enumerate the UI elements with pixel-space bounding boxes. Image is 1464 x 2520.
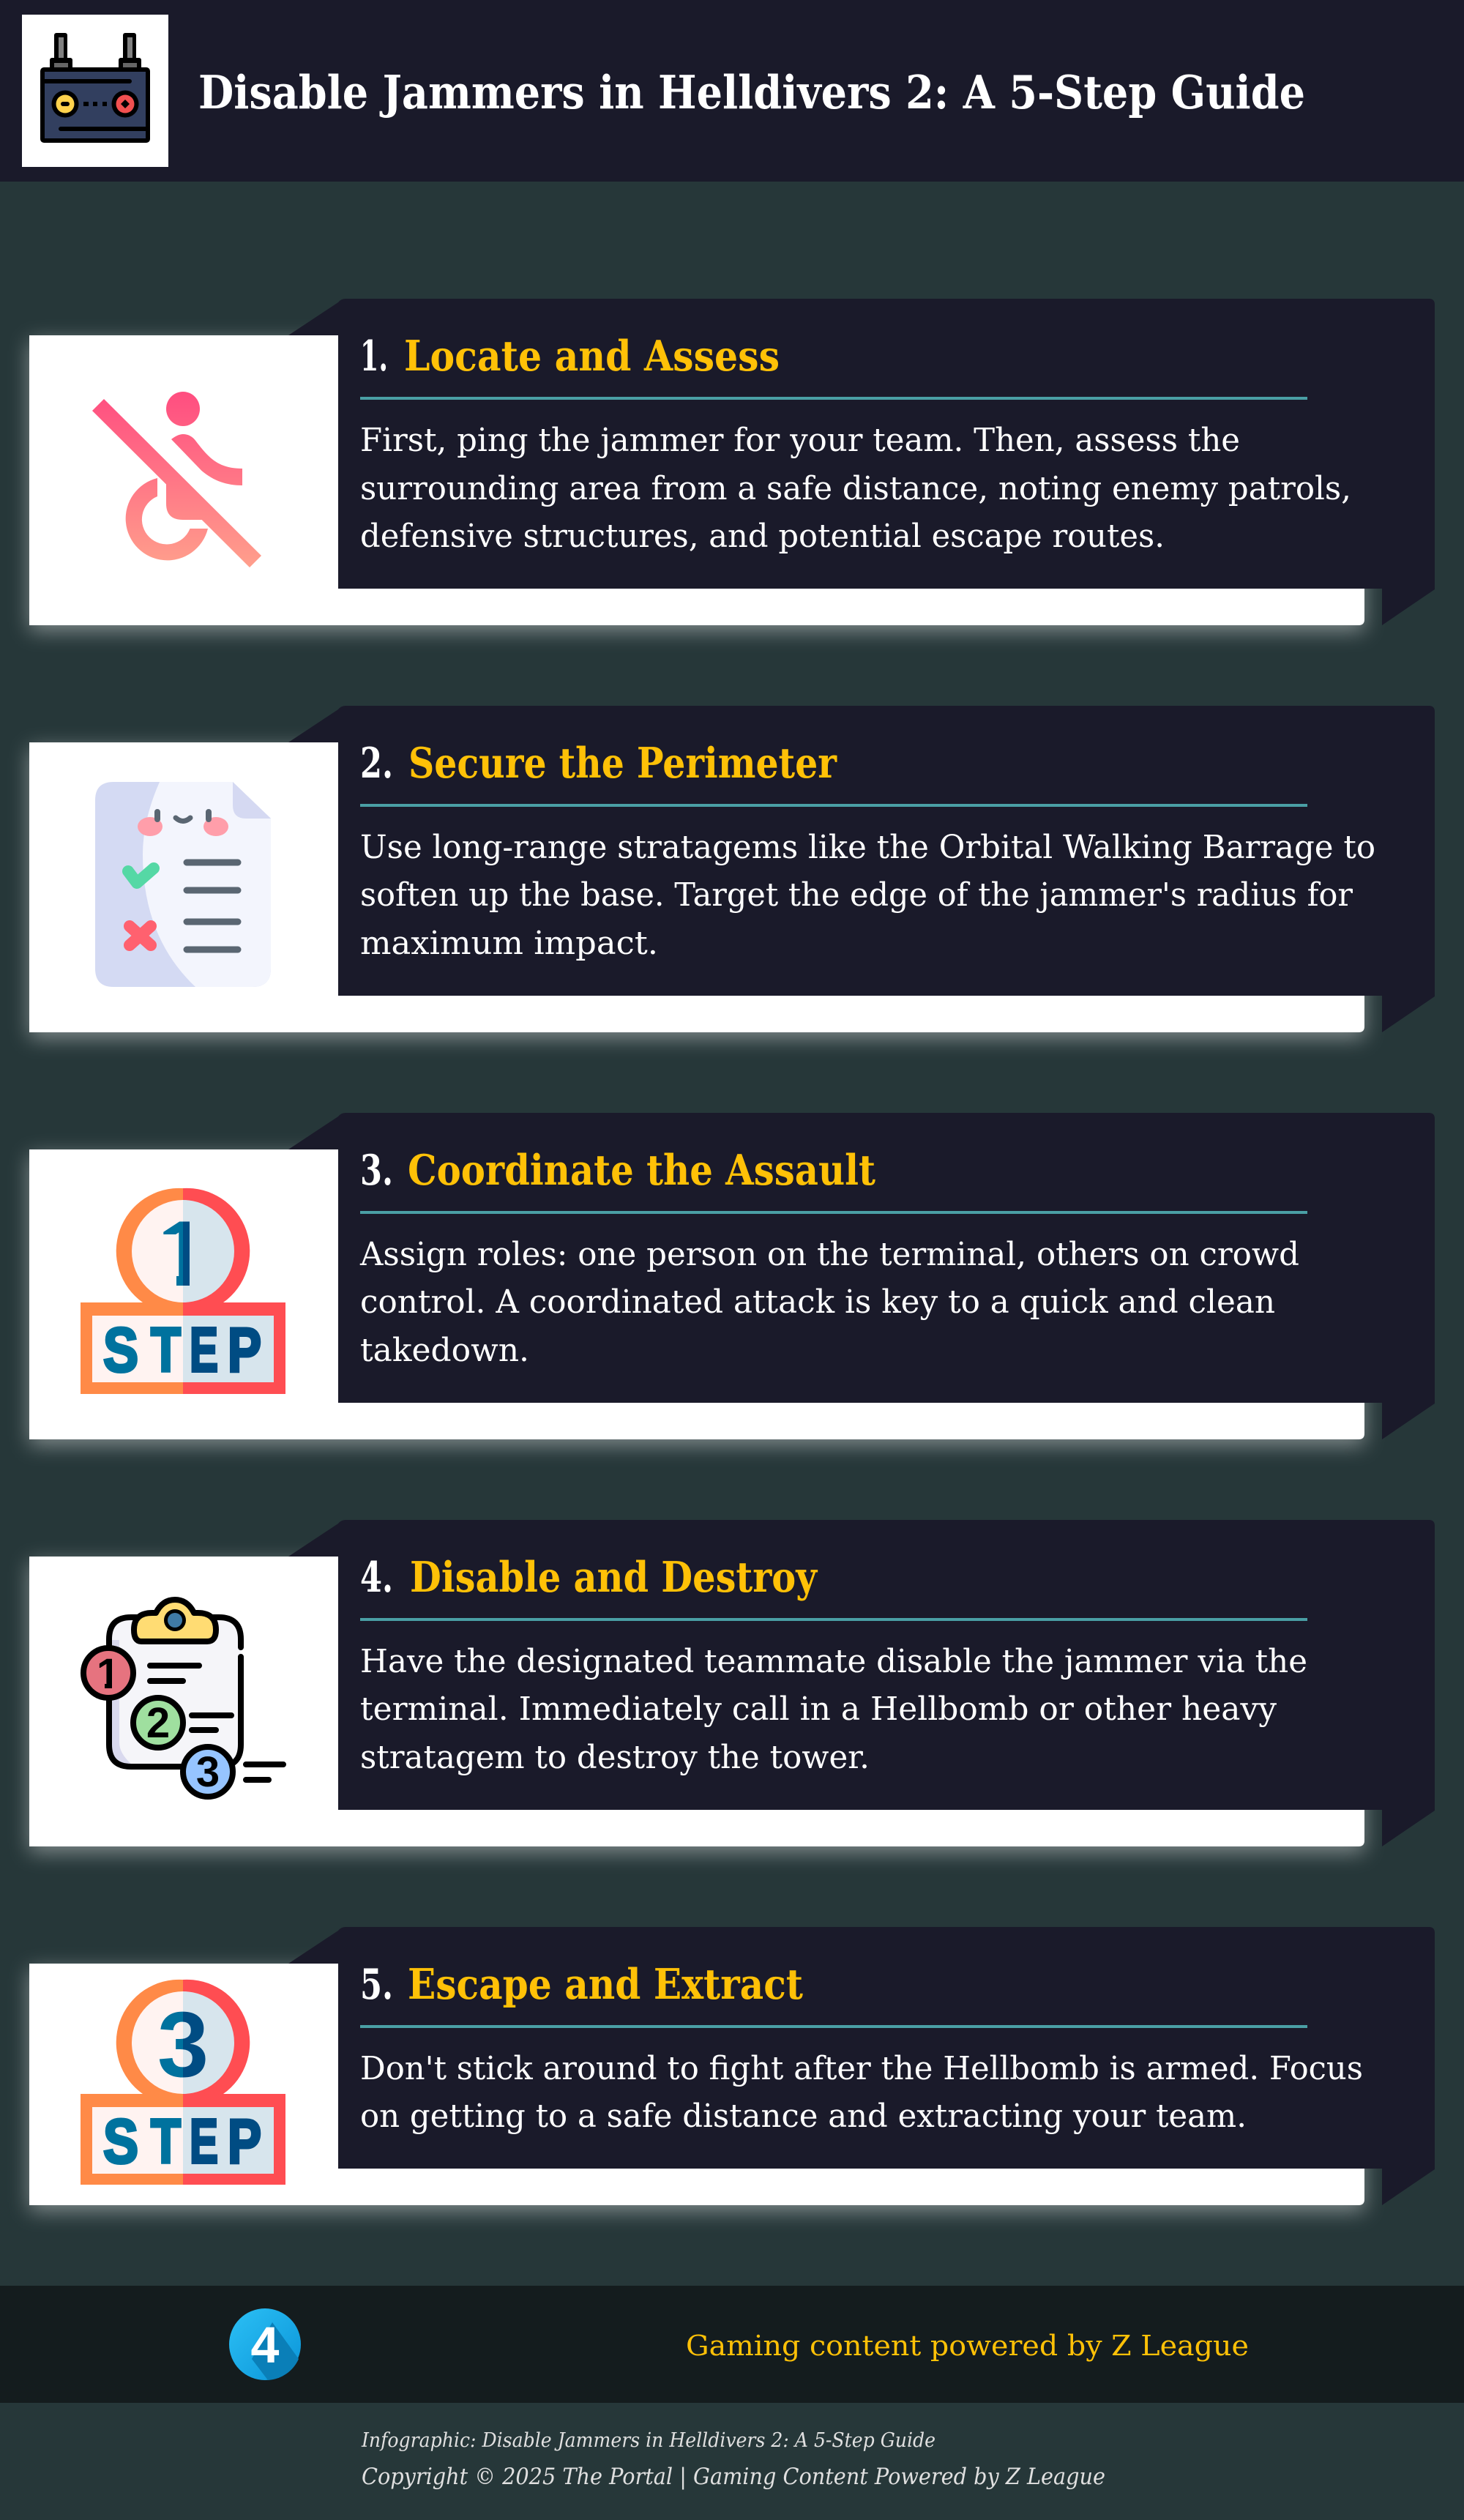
text: step 4 body (360, 1643, 1307, 1776)
text: step 3 body: takedown. (360, 1332, 529, 1369)
icon: crossed-out wheelchair (92, 392, 261, 567)
icon: step 3 badge: P (228, 2107, 261, 2177)
panel: step 4 (29, 1520, 1435, 1852)
text: step 2 body: soften up the base. Target the edge of the jammer's radius for (360, 876, 1353, 914)
icon: step 1 badge: S (103, 1316, 138, 1385)
heading: step 1: Locate and Assess (404, 332, 780, 381)
heading: step 1: 1. (360, 332, 388, 381)
text: step 3 body: Assign roles: one person on the terminal, others on crowd (359, 1236, 1299, 1273)
icon: numbered clipboard: 2 (146, 1699, 170, 1747)
text: step 4 body: terminal. Immediately call in a Hellbomb or other heavy (360, 1690, 1277, 1728)
icon: Z League logo (229, 2308, 301, 2380)
text: step 1 body: First, ping the jammer for your team. Then, assess the (360, 422, 1240, 459)
header (0, 0, 1464, 182)
icon: step 3 badge: 3 (157, 1993, 209, 2096)
footer band (0, 2286, 1464, 2403)
heading: step 3: 3. (360, 1146, 393, 1195)
icon: step 3 badge: T (151, 2107, 181, 2177)
heading: step 4: Disable and Destroy (410, 1553, 818, 1602)
icon: step 3 badge (81, 1980, 285, 2185)
text: step 2 body: maximum impact. (360, 925, 658, 962)
text: step 5 body: on getting to a safe distance and extracting your team. (360, 2098, 1247, 2135)
text: step 5 body: Don't stick around to fight after the Hellbomb is armed. Focus (360, 2050, 1363, 2087)
footer tagline: Gaming content powered by Z League (686, 2330, 1249, 2362)
title: Disable Jammers in Helldivers 2: A 5-Step Guide (198, 65, 1305, 119)
icon: checklist document (95, 782, 271, 987)
icon: jammer battery logo (22, 15, 168, 167)
heading: step 2: 2. (360, 739, 393, 788)
footer credits: Infographic: Disable Jammers in Helldivers 2: A 5-Step Guide (361, 2429, 935, 2452)
text: step 2 body (360, 829, 1375, 962)
heading: step 5: 5. (360, 1960, 393, 2009)
icon: step 3 badge: E (190, 2107, 218, 2177)
icon: numbered clipboard: 1 (97, 1650, 120, 1698)
icon: step 1 badge: E (190, 1316, 218, 1385)
text: step 4 body: stratagem to destroy the tower. (360, 1739, 870, 1776)
text: step 3 body (359, 1236, 1299, 1369)
text: step 2 body: Use long-range stratagems like the Orbital Walking Barrage to (360, 829, 1375, 866)
heading: step 2: Secure the Perimeter (408, 739, 837, 788)
footer credits: Copyright © 2025 The Portal | Gaming Content Powered by Z League (362, 2464, 1105, 2490)
icon: numbered clipboard: 3 (196, 1748, 220, 1796)
heading: step 3: Coordinate the Assault (408, 1146, 876, 1195)
icon: Z League logo: 4 (251, 2316, 280, 2374)
text: step 3 body: control. A coordinated attack is key to a quick and clean (360, 1283, 1275, 1321)
text: step 1 body: defensive structures, and potential escape routes. (360, 518, 1165, 555)
icon: step 3 badge: S (103, 2107, 138, 2177)
panel: step 1 (29, 299, 1435, 631)
text: step 5 body (360, 2050, 1363, 2135)
footer credits (361, 2429, 1105, 2490)
panel: step 3 (29, 1113, 1435, 1445)
heading: step 5: Escape and Extract (408, 1960, 804, 2009)
panel: step 2 (29, 706, 1435, 1038)
icon: step 1 badge (81, 1188, 285, 1394)
icon: step 1 badge: P (228, 1316, 261, 1385)
icon: step 1 badge: T (151, 1316, 181, 1385)
icon: numbered clipboard (83, 1600, 283, 1797)
text: step 1 body: surrounding area from a safe distance, noting enemy patrols, (360, 470, 1351, 507)
heading: step 4: 4. (360, 1553, 393, 1602)
text: step 1 body (360, 422, 1351, 555)
icon: step 1 badge: 1 (157, 1201, 209, 1305)
panel: step 5 (29, 1927, 1435, 2211)
text: step 4 body: Have the designated teammate disable the jammer via the (360, 1643, 1307, 1680)
